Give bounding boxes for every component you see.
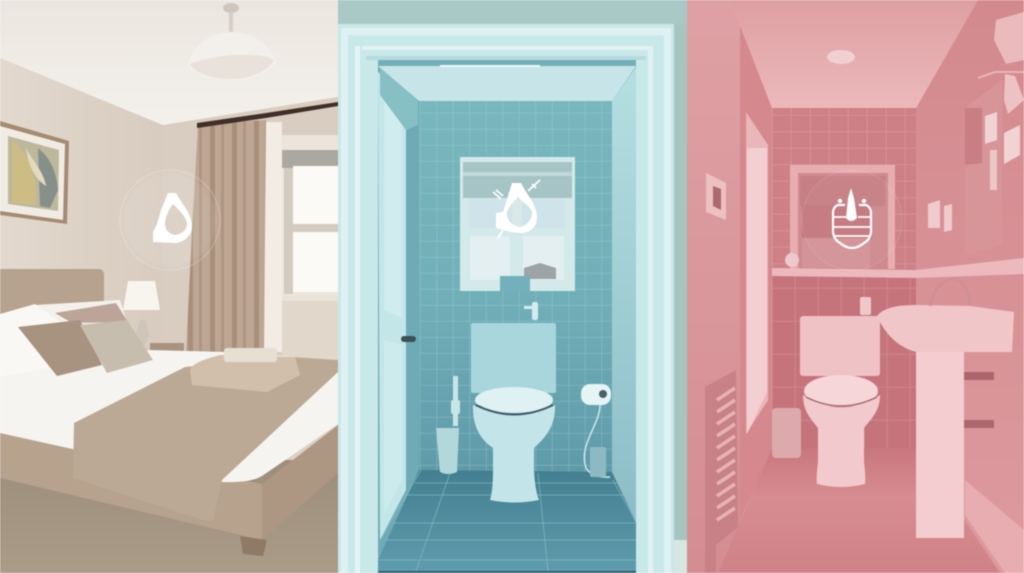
window with blind — [790, 165, 895, 269]
toilet — [471, 302, 556, 502]
headboard — [0, 269, 104, 325]
contamination icon — [802, 170, 902, 270]
pink panel walls — [687, 0, 1024, 573]
sheer curtain — [264, 122, 282, 352]
bin — [772, 408, 801, 458]
panel: clean blue bathroom — [338, 0, 687, 573]
ceiling lamp — [188, 3, 276, 80]
top wall band — [338, 0, 687, 24]
toilet roll and hose — [581, 384, 611, 477]
curtain rod — [197, 102, 338, 128]
toilet brush set — [436, 376, 460, 474]
mirror and wall items — [928, 12, 1024, 255]
window — [460, 157, 575, 291]
toilet — [800, 316, 880, 487]
folded towels — [190, 348, 300, 392]
skirting wall — [965, 480, 1024, 573]
shelf — [772, 253, 1024, 315]
pedestal sink — [877, 279, 1014, 538]
smoke detector — [827, 50, 855, 64]
window — [278, 135, 338, 301]
bed frame — [0, 425, 338, 556]
wall switch plate — [706, 173, 726, 220]
water drop icon in halo — [120, 170, 220, 270]
radiator — [705, 370, 738, 573]
panel: pink bathroom — [687, 0, 1024, 573]
water drop icon with sparkles — [493, 180, 540, 238]
carpet — [0, 460, 338, 573]
bed throw blanket — [73, 357, 338, 520]
doorway strip — [746, 112, 768, 434]
room interior — [378, 60, 636, 573]
door frame — [338, 24, 674, 573]
panel: bedroom — [0, 0, 338, 573]
framed leaf artwork — [0, 121, 69, 224]
open door — [378, 68, 418, 540]
right wall strip — [672, 24, 687, 573]
bedside lamp and table — [123, 281, 184, 351]
bedroom walls and ceiling — [0, 0, 338, 573]
pillows — [0, 300, 153, 377]
curtain — [186, 120, 266, 352]
white duvet — [0, 350, 338, 482]
